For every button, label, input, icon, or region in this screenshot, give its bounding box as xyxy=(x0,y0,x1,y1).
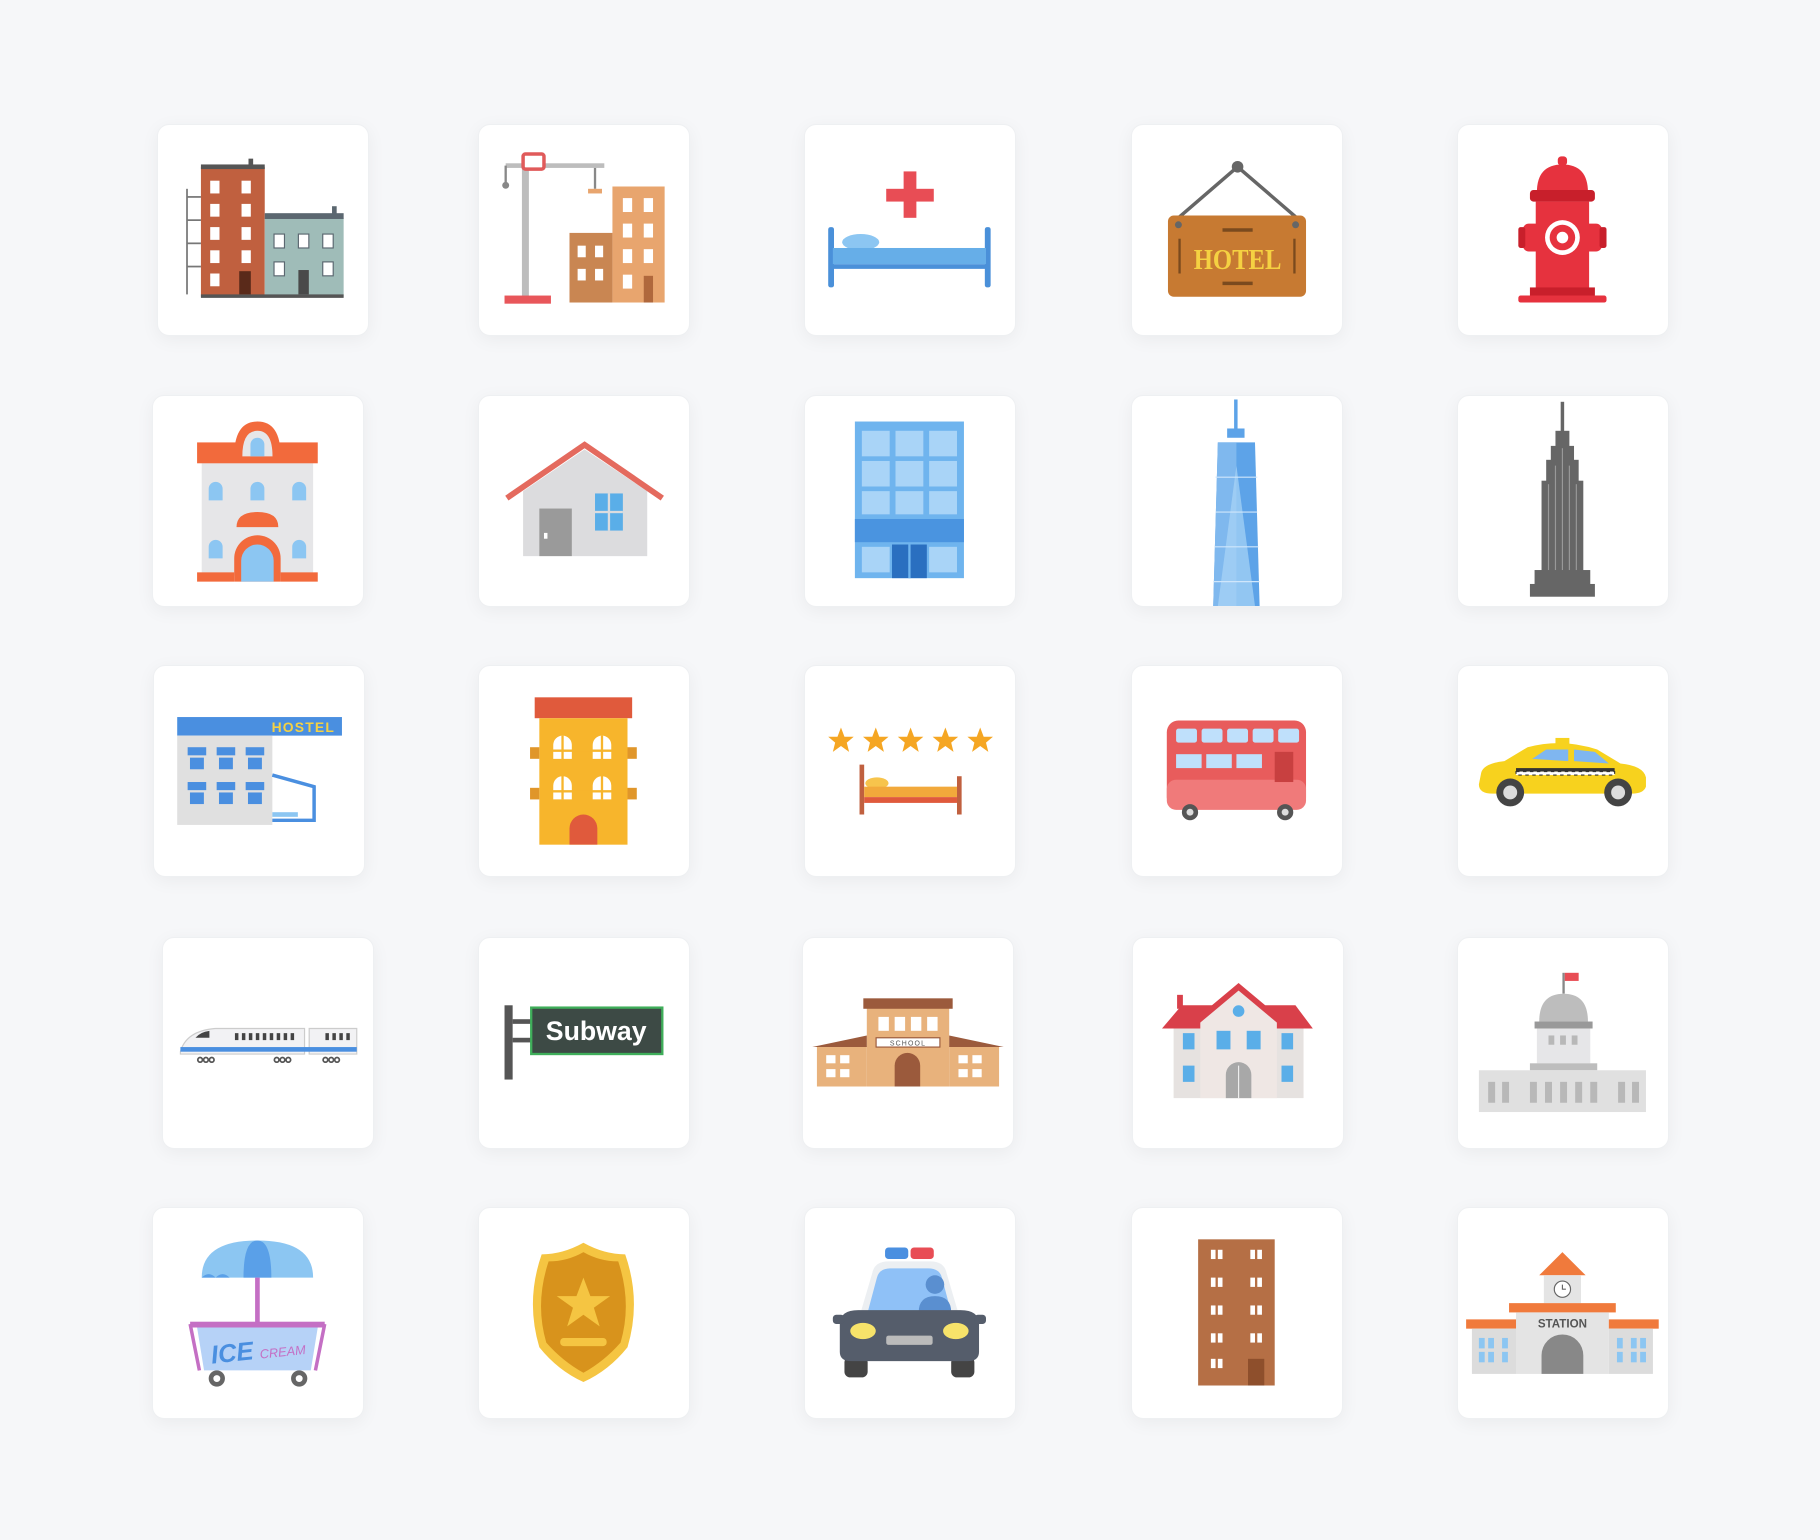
card: ice cream cart: ICE xyxy=(210,1337,256,1370)
card: hostel xyxy=(153,665,365,877)
card: orange hotel xyxy=(478,665,690,877)
card: taxi xyxy=(1457,665,1669,877)
card: historic building xyxy=(152,395,364,607)
card: glass office building xyxy=(804,395,1016,607)
card: fire hydrant xyxy=(1457,124,1669,336)
card: house xyxy=(478,395,690,607)
card: double decker bus xyxy=(1131,665,1343,877)
card: ice cream cart: CREAM xyxy=(259,1342,307,1362)
card: police badge xyxy=(478,1207,690,1419)
card: subway sign xyxy=(478,937,690,1149)
card: crane construction xyxy=(478,124,690,336)
card: subway sign: Subway xyxy=(546,1016,647,1046)
card: brown tower building xyxy=(1131,1207,1343,1419)
card: school xyxy=(802,937,1014,1149)
card: red roof house xyxy=(1132,937,1344,1149)
card: station: STATION xyxy=(1538,1318,1587,1331)
card: school: SCHOOL xyxy=(890,1040,926,1047)
card: skyscraper tower xyxy=(1131,395,1343,607)
card: hotel sign: HOTEL xyxy=(1194,243,1281,275)
card: ice cream cart xyxy=(152,1207,364,1419)
card: hospital bed xyxy=(804,124,1016,336)
card: hostel: HOSTEL xyxy=(272,719,335,735)
card: empire state building xyxy=(1457,395,1669,607)
card: five star bed xyxy=(804,665,1016,877)
card: capitol xyxy=(1457,937,1669,1149)
card: apartment buildings xyxy=(157,124,369,336)
card: bullet train xyxy=(162,937,374,1149)
card: station xyxy=(1457,1207,1669,1419)
card: police car xyxy=(804,1207,1016,1419)
card: hotel sign xyxy=(1131,124,1343,336)
